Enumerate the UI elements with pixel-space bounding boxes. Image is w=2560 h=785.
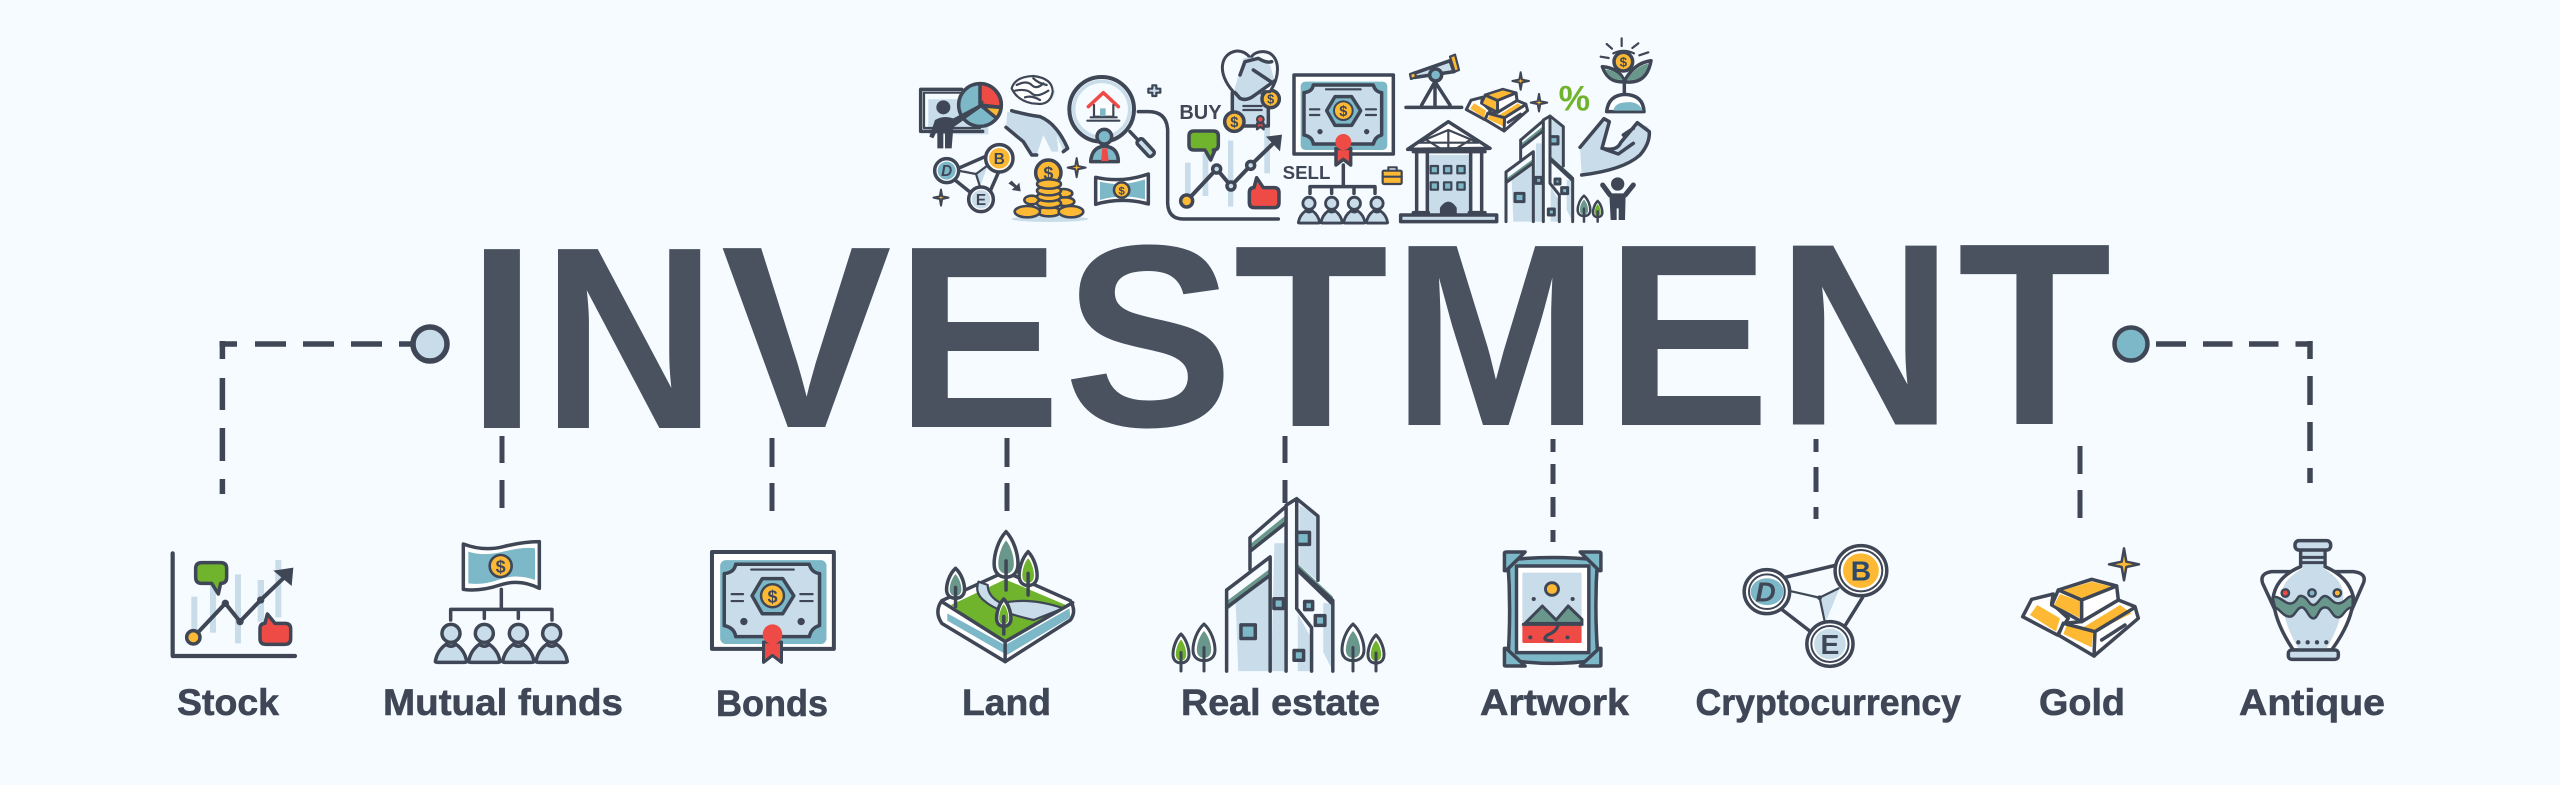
item: artwork [1480, 552, 1629, 723]
right connector with circle [2114, 328, 2312, 483]
left connector with circle [220, 327, 447, 494]
icon: money plant [1601, 38, 1651, 112]
icon: gold bars [2023, 548, 2139, 656]
vertical dashed connectors [502, 436, 2080, 542]
label: Land [962, 682, 1051, 723]
icon: coin stacks: $ [1043, 163, 1053, 183]
icon: buy/sell chart [1179, 102, 1282, 208]
icon: banknote and group: $ [496, 557, 506, 577]
icon: framed picture [1504, 552, 1601, 666]
icon: bank [1401, 122, 1497, 222]
icon: magnifier over house [1069, 77, 1278, 219]
icon: telescope [1406, 55, 1462, 107]
top icon cluster, left half [921, 51, 1282, 222]
icon: tower with trees [1173, 499, 1384, 671]
title: N [1777, 190, 1953, 480]
title: T [1958, 190, 2112, 480]
label: Antique [2239, 682, 2385, 723]
icon: brain [1012, 76, 1055, 105]
label: Artwork [1480, 682, 1629, 723]
icon: presentation with pie chart [921, 84, 1001, 148]
title: S [1064, 192, 1234, 482]
title: T [1234, 192, 1388, 482]
icon: reaching hand [1006, 112, 1068, 155]
title: V [721, 193, 893, 483]
icon: crypto coin network: B [1851, 556, 1871, 587]
icon: banknote and group [435, 542, 567, 662]
title: N [542, 194, 716, 484]
icon: land plot with trees [938, 532, 1074, 662]
item: mutual funds [383, 542, 623, 723]
item: antique [2239, 541, 2385, 723]
icon: small towers [1506, 116, 1573, 222]
label: Mutual funds [383, 682, 623, 723]
title: E [895, 193, 1061, 483]
icon: banknote [1096, 174, 1148, 204]
item: gold [2023, 548, 2139, 723]
icon: bond certificate: $ [768, 586, 778, 606]
icon: money plant: $ [1620, 55, 1628, 70]
icon: plus [1148, 85, 1160, 96]
icon: bond certificate [712, 552, 834, 662]
icon: trees and person [1578, 177, 1633, 222]
icon: certificate with team: $ [1339, 104, 1347, 120]
icon: certificate with team: SELL [1283, 162, 1330, 183]
label: Gold [2039, 682, 2125, 723]
icon: crypto coin network [1744, 546, 1887, 666]
item: land [938, 532, 1074, 723]
icon: buy/sell chart: BUY [1179, 102, 1222, 124]
label: Real estate [1181, 682, 1380, 723]
icon: certificate with team [1283, 75, 1393, 223]
item: stock [173, 553, 295, 723]
icon: cryptocurrency network: B [994, 151, 1005, 168]
icon: banknote: $ [1119, 185, 1126, 197]
icon: crypto coin network: E [1821, 629, 1839, 660]
top icon cluster, right half [1283, 38, 1651, 223]
icon: percent: % [1559, 80, 1590, 119]
icon: giving hand [1580, 118, 1649, 175]
label: Stock [177, 682, 279, 723]
icon: sparkle [1068, 158, 1086, 177]
icon: briefcase [1383, 167, 1402, 184]
icon: crypto coin network: D [1755, 577, 1776, 607]
icon: handshake contract [1222, 51, 1279, 131]
label: Cryptocurrency [1696, 682, 1961, 723]
icon: antique vase [2262, 541, 2364, 659]
item: bonds [712, 552, 834, 724]
item: cryptocurrency [1696, 546, 1961, 723]
item: real estate [1173, 499, 1384, 723]
title: M [1392, 191, 1600, 481]
icon: hand outline [1006, 111, 1068, 155]
icon: gold bars with sparkles [1466, 72, 1547, 131]
icon: handshake contract: $ [1267, 93, 1274, 107]
icon: cryptocurrency network: D [941, 163, 952, 180]
icon: coin stacks [1008, 160, 1088, 222]
title: E [1606, 191, 1770, 481]
label: Bonds [716, 683, 828, 724]
icon: cryptocurrency network: E [976, 192, 986, 209]
icon: cryptocurrency network [933, 145, 1013, 212]
title: I [467, 194, 537, 484]
icon: stock chart [173, 553, 295, 656]
icon: handshake contract: $ [1230, 115, 1238, 131]
